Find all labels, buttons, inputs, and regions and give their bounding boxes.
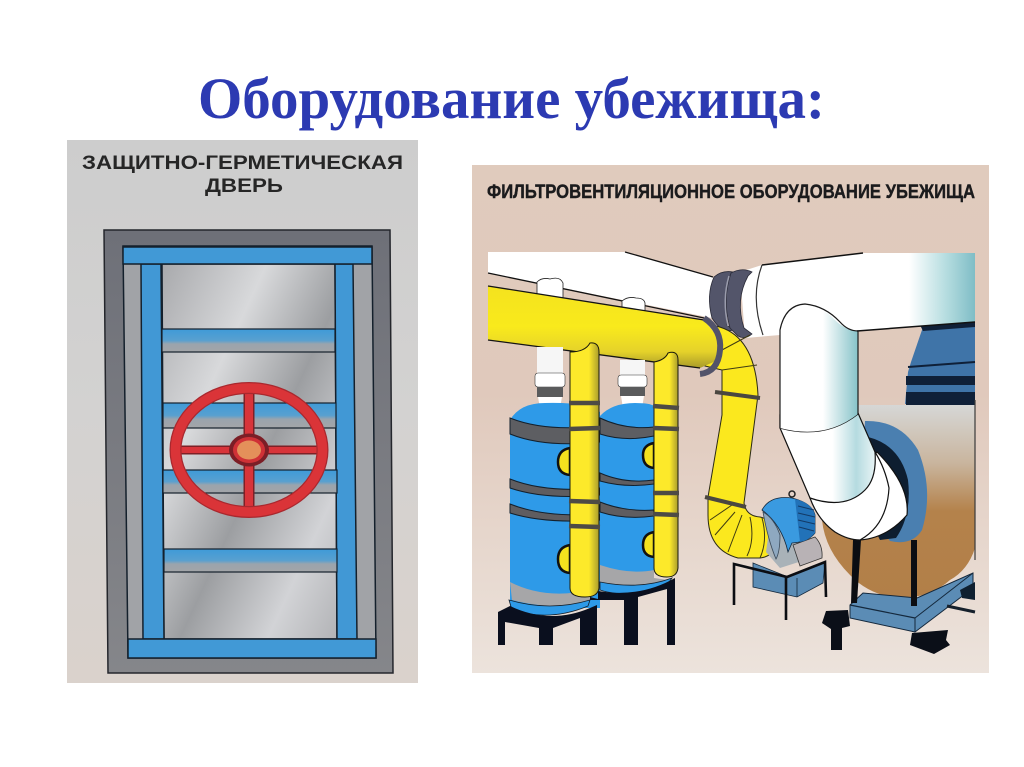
title: Оборудование убежища: [198,66,825,131]
door panel heading: ЗАЩИТНО-ГЕРМЕТИЧЕСКАЯ [82,153,403,174]
right filter cylinder [600,360,672,594]
left filter cylinder [509,347,600,615]
door panel heading: ДВЕРЬ [205,176,283,197]
fan housing [822,320,975,598]
yellow main pipe [488,286,720,374]
small motor on table [734,491,826,620]
white horizontal duct and riser [740,253,975,432]
panel: filter-ventilation equipment [472,165,989,673]
panel: protective hermetic door [67,140,418,683]
red handwheel [175,386,323,513]
yellow flexible hose [705,326,776,558]
door drawing [104,230,393,673]
white elbow duct [780,413,907,540]
dark duct flange [709,270,752,338]
white air duct upper left [488,252,713,318]
yellow vertical pipes [569,343,679,597]
filter support tables [498,578,675,645]
stand base [822,540,975,654]
